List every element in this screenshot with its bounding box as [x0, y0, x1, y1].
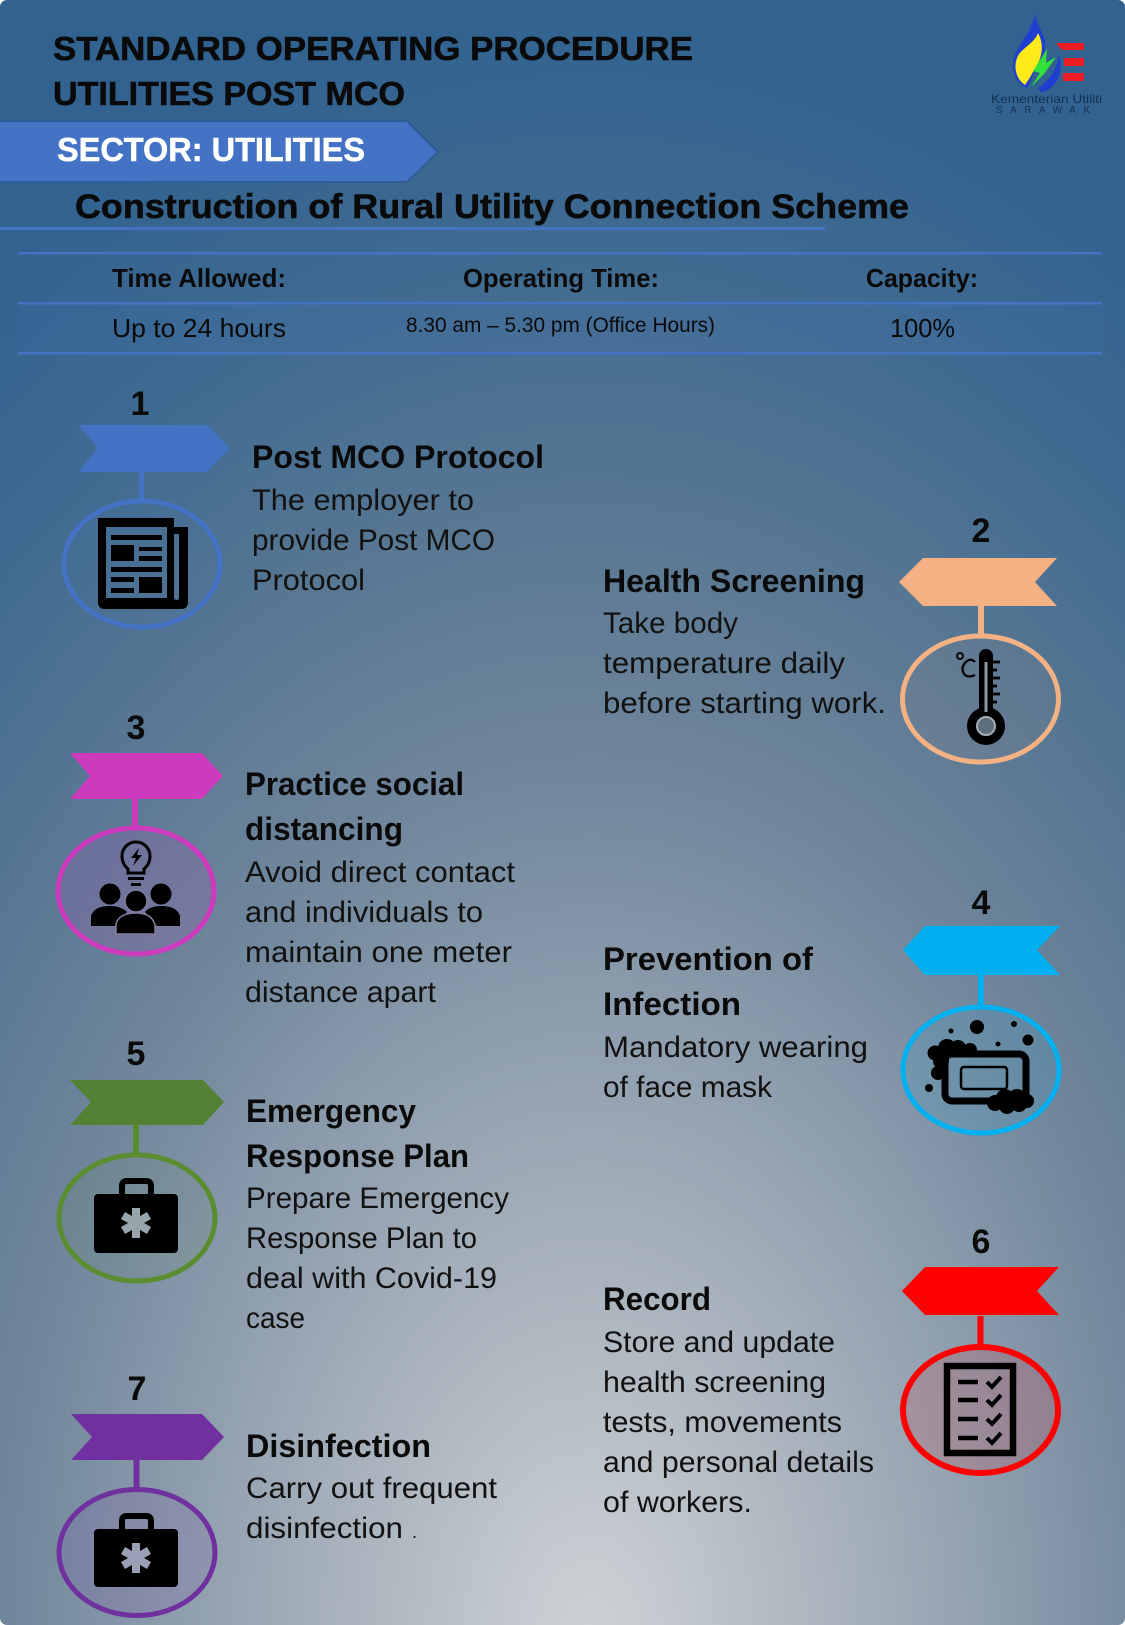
step 1: Post MCO Protocol: Protocol	[252, 564, 365, 597]
step 2: Health Screening: Take body	[603, 607, 738, 640]
sector banner: SECTOR: UTILITIES	[57, 131, 365, 168]
step 7: Disinfection: Disinfection	[246, 1428, 431, 1464]
info table: 100%	[890, 313, 955, 343]
step 7: Disinfection: .	[412, 1522, 417, 1542]
step 6: Record: of workers.	[603, 1486, 752, 1519]
step 7: Disinfection: disinfection	[246, 1512, 403, 1545]
step 7: Disinfection	[59, 1370, 498, 1616]
step 6: Record: health screening	[603, 1366, 826, 1399]
subtitle: Construction of Rural Utility Connection Scheme	[75, 188, 909, 226]
logo: Kementerian Utiliti Sarawak: SARAWAK	[996, 105, 1090, 116]
info table: Operating Time:	[463, 263, 659, 293]
step 3: Practice social distancing: Practice social	[245, 766, 464, 802]
step 6: Record	[603, 1223, 1059, 1519]
icon: thermometer	[957, 649, 1005, 745]
info table: 8.30 am – 5.30 pm (Office Hours)	[406, 314, 715, 337]
step 7: Disinfection: Carry out frequent	[246, 1472, 498, 1505]
step 5: Emergency Response Plan: case	[246, 1302, 305, 1335]
icon: people with light bulb	[91, 842, 180, 934]
step 2: Health Screening: Health Screening	[603, 563, 865, 599]
step 3: Practice social distancing: Avoid direct contact	[245, 856, 516, 889]
step 2: Health Screening: before starting work.	[603, 687, 886, 720]
step 5: Emergency Response Plan: Emergency	[246, 1093, 416, 1129]
title	[53, 30, 693, 112]
icon: newspaper	[98, 518, 188, 609]
info table: Capacity:	[866, 263, 978, 293]
step 5: Emergency Response Plan: Response Plan to	[246, 1222, 477, 1255]
icon: first aid case	[94, 1181, 178, 1253]
info table: Time Allowed:	[112, 263, 286, 293]
step 1: Post MCO Protocol: provide Post MCO	[252, 524, 495, 557]
step 5: Emergency Response Plan: 5	[127, 1035, 145, 1073]
logo: Kementerian Utiliti Sarawak	[991, 13, 1102, 116]
icon: first aid case	[94, 1516, 178, 1587]
step 2: Health Screening: 2	[972, 512, 990, 550]
logo: Kementerian Utiliti Sarawak: Kementerian Utiliti	[991, 92, 1102, 106]
step 4: Prevention of Infection: of face mask	[603, 1071, 773, 1104]
info table	[18, 252, 1102, 354]
step 5: Emergency Response Plan: deal with Covid-19	[246, 1262, 497, 1295]
title: STANDARD OPERATING PROCEDURE	[53, 30, 693, 67]
sector banner	[0, 121, 438, 182]
step 1: Post MCO Protocol	[64, 385, 544, 627]
step 4: Prevention of Infection: 4	[972, 884, 991, 922]
step 7: Disinfection: 7	[128, 1370, 146, 1408]
step 2: Health Screening: temperature daily	[603, 647, 845, 680]
icon: soap with bubbles	[925, 1020, 1034, 1114]
step 3: Practice social distancing: and individuals to	[245, 896, 483, 929]
step 1: Post MCO Protocol: 1	[131, 385, 149, 423]
step 1: Post MCO Protocol: The employer to	[252, 484, 474, 517]
step 4: Prevention of Infection: Prevention of	[603, 941, 813, 977]
title: UTILITIES POST MCO	[53, 75, 405, 112]
step 6: Record: tests, movements	[603, 1406, 842, 1439]
step 3: Practice social distancing: 3	[127, 709, 145, 747]
step 1: Post MCO Protocol: Post MCO Protocol	[252, 439, 544, 475]
icon: checklist	[947, 1366, 1013, 1453]
step 4: Prevention of Infection: Mandatory wearing	[603, 1031, 868, 1064]
step 3: Practice social distancing: distancing	[245, 811, 403, 847]
step 4: Prevention of Infection	[603, 884, 1060, 1133]
step 3: Practice social distancing: maintain one meter	[245, 936, 512, 969]
step 4: Prevention of Infection: Infection	[603, 986, 741, 1022]
step 6: Record: 6	[972, 1223, 990, 1261]
step 6: Record: Record	[603, 1281, 711, 1317]
info table: Up to 24 hours	[112, 313, 286, 343]
step 3: Practice social distancing	[58, 709, 516, 1009]
step 5: Emergency Response Plan: Prepare Emergency	[246, 1182, 509, 1215]
step 2: Health Screening	[603, 512, 1058, 762]
step 6: Record: Store and update	[603, 1326, 835, 1359]
step 5: Emergency Response Plan	[59, 1035, 509, 1335]
step 5: Emergency Response Plan: Response Plan	[246, 1138, 469, 1174]
step 6: Record: and personal details	[603, 1446, 874, 1479]
step 3: Practice social distancing: distance apart	[245, 976, 437, 1009]
